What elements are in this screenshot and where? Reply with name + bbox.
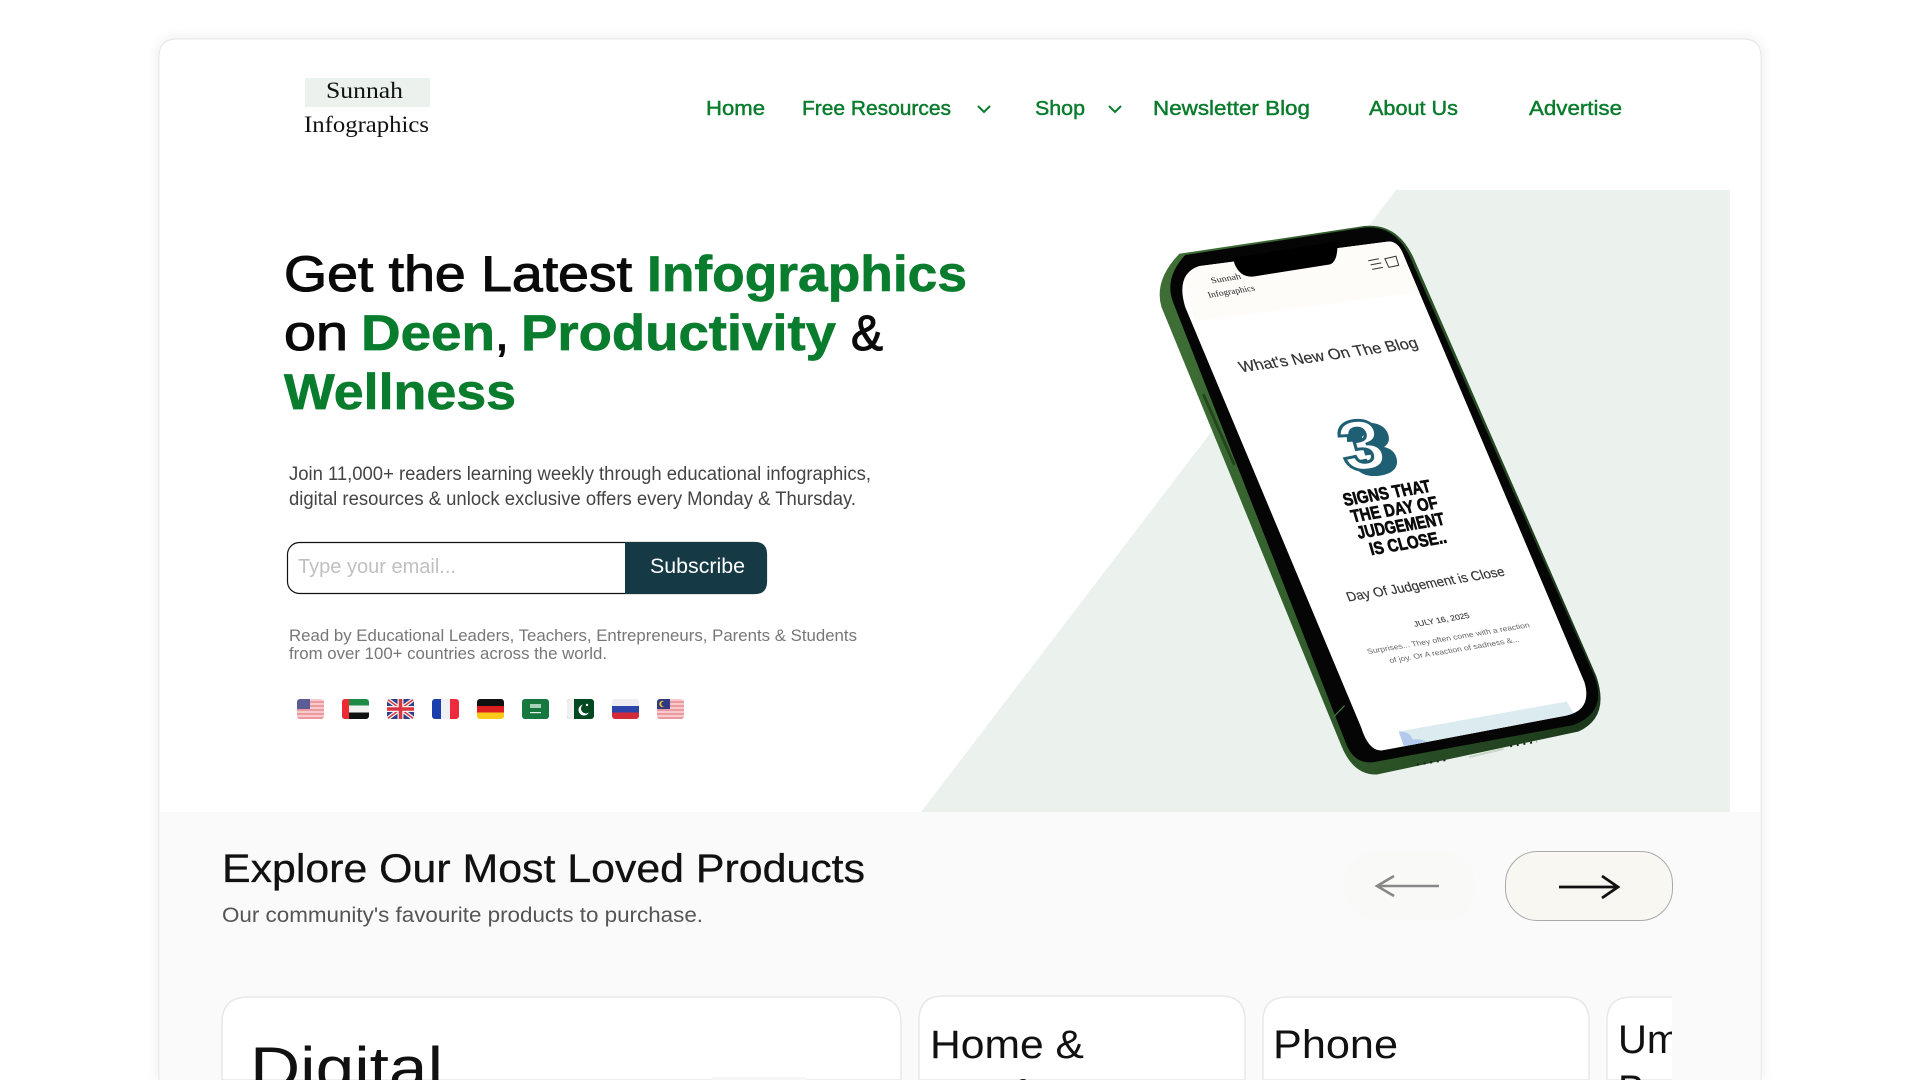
product cards row bbox=[222, 996, 1738, 1080]
phone mockup bbox=[1160, 226, 1601, 775]
phone body bbox=[1160, 226, 1601, 775]
body seam bbox=[1333, 706, 1345, 717]
next arrow button bbox=[1506, 852, 1672, 920]
card: phone: Phone bbox=[1273, 1023, 1398, 1067]
blog title graphic: IS CLOSE.. bbox=[1367, 527, 1449, 559]
screen logo bbox=[1206, 271, 1256, 300]
hero heading: on bbox=[284, 305, 348, 361]
card: digital bbox=[222, 997, 901, 1080]
section subheading: Our community's favourite products to purchase. bbox=[222, 904, 703, 927]
blog number three: 3 bbox=[1338, 408, 1406, 491]
hero heading: Productivity bbox=[521, 305, 836, 361]
hero heading: & bbox=[851, 305, 883, 361]
audience note: Read by Educational Leaders, Teachers, Entrepreneurs, Parents & Students bbox=[289, 627, 857, 645]
hero heading: , bbox=[495, 305, 509, 361]
blog title graphic: SIGNS THAT bbox=[1340, 476, 1433, 510]
navigation: Advertise bbox=[1529, 98, 1622, 120]
navigation: Home bbox=[706, 98, 765, 120]
hero description: digital resources & unlock exclusive offers every Monday & Thursday. bbox=[289, 489, 856, 510]
phone screen bbox=[1179, 233, 1586, 754]
email signup form: Type your email... bbox=[298, 556, 456, 578]
flag: UAE bbox=[342, 699, 369, 719]
card: home and comfort bbox=[919, 996, 1245, 1080]
blog post excerpt: Surprises... They often come with a reaction bbox=[1366, 621, 1531, 656]
card: partial fourth: Umrah bbox=[1618, 1018, 1738, 1062]
hero heading: Get the Latest bbox=[284, 246, 632, 302]
hero description: Join 11,000+ readers learning weekly through educational infographics, bbox=[289, 464, 871, 485]
navigation: Shop bbox=[1035, 98, 1085, 120]
hero heading: Deen bbox=[361, 305, 495, 361]
navigation: Free Resources bbox=[802, 98, 951, 120]
flag: UK bbox=[387, 699, 414, 719]
navigation bbox=[706, 98, 1622, 120]
flag: Saudi Arabia bbox=[522, 699, 549, 719]
hero description bbox=[289, 464, 871, 510]
blog number three: 3 bbox=[1329, 404, 1394, 487]
email signup form: Subscribe bbox=[650, 555, 745, 578]
screen menu icons bbox=[1368, 256, 1399, 269]
blog post date: JULY 16, 2025 bbox=[1412, 611, 1471, 629]
blog title graphic: JUDGEMENT bbox=[1354, 508, 1447, 543]
flag: Pakistan bbox=[567, 699, 594, 719]
previous arrow button bbox=[1345, 852, 1475, 920]
side button bbox=[1204, 395, 1234, 464]
screen heading: What's New On The Blog bbox=[1236, 335, 1421, 376]
blog post excerpt bbox=[1366, 621, 1531, 665]
speaker holes bbox=[1417, 742, 1537, 765]
panel: products section bbox=[160, 812, 1760, 1080]
blog image strip bbox=[1399, 702, 1574, 746]
logo bbox=[304, 78, 430, 137]
phone notch bbox=[1233, 242, 1337, 277]
screen logo: Infographics bbox=[1206, 283, 1256, 300]
email signup form bbox=[288, 542, 767, 594]
audience note bbox=[289, 627, 857, 663]
blog post excerpt: of joy. Or A reaction of sadness &... bbox=[1388, 636, 1521, 665]
screen header band bbox=[1184, 242, 1420, 292]
hero background shape bbox=[921, 190, 1730, 812]
logo: Infographics bbox=[304, 112, 429, 137]
section heading: Explore Our Most Loved Products bbox=[222, 847, 865, 891]
logo: Sunnah bbox=[326, 78, 404, 103]
blog post title: Day Of Judgement is Close bbox=[1344, 564, 1507, 604]
blog title graphic bbox=[1340, 476, 1449, 559]
phone bezel bbox=[1170, 227, 1598, 762]
country flags bbox=[297, 699, 684, 719]
hero heading: Infographics bbox=[647, 246, 967, 302]
audience note: from over 100+ countries across the world. bbox=[289, 645, 607, 663]
flag: France bbox=[432, 699, 459, 719]
hero heading bbox=[284, 246, 967, 420]
flag: Malaysia bbox=[657, 699, 684, 719]
card: home and comfort: Home & bbox=[930, 1023, 1084, 1067]
blog title graphic: THE DAY OF bbox=[1348, 492, 1440, 526]
charging port bbox=[1470, 749, 1503, 757]
card: phone bbox=[1263, 997, 1589, 1080]
navigation: Newsletter Blog bbox=[1153, 98, 1310, 120]
flag: Germany bbox=[477, 699, 504, 719]
screen logo: Sunnah bbox=[1209, 271, 1243, 285]
flag: USA bbox=[297, 699, 324, 719]
blog image accent bbox=[1398, 732, 1428, 746]
card: partial fourth bbox=[1606, 996, 1672, 1080]
hero heading: Wellness bbox=[284, 364, 516, 420]
flag: Russia bbox=[612, 699, 639, 719]
navigation: About Us bbox=[1369, 98, 1458, 120]
